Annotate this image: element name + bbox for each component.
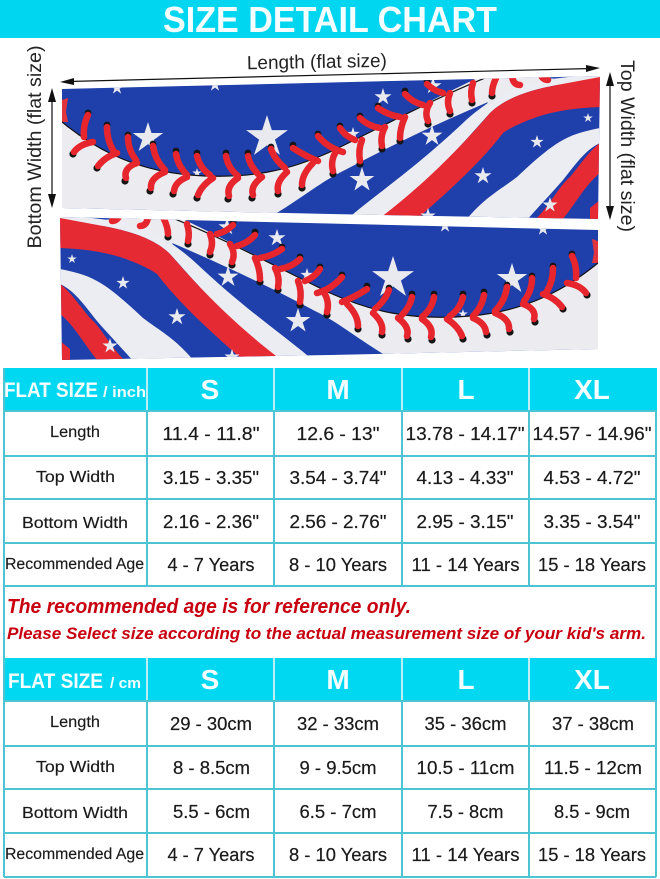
row: bottom width cm [22,802,630,822]
row: length [50,424,652,444]
inch header row: / inch [103,384,146,401]
row: length: 11.4 - 11.8" [162,424,260,444]
label: bottom width: Bottom Width (flat size) [25,46,46,248]
row: length cm: 32 - 33cm [297,714,379,734]
row: top width: 3.15 - 3.35" [163,468,259,488]
row: bottom width cm: 6.5 - 7cm [300,802,376,822]
row: top width cm: 9 - 9.5cm [300,758,376,778]
row: recommended age cm: 11 - 14 Years [412,845,520,865]
label: top width: Top Width (flat size) [616,60,637,232]
inch header row [3,368,657,411]
row: recommended age: 11 - 14 Years [412,555,520,575]
row: recommended age cm [5,845,646,865]
cm grid [4,658,656,877]
row: top width: 4.13 - 4.33" [416,468,514,488]
note line 1: The recommended age is for reference only. [7,596,411,618]
sleeve: bottom [50,211,605,366]
inch header row: XL [574,374,610,405]
row: length: Length [50,424,100,441]
row: bottom width cm: Bottom Width [22,805,128,822]
row: top width: Top Width [36,469,115,486]
row: bottom width: Bottom Width [22,515,128,532]
label: length: Length (flat size) [247,51,387,74]
table: inch [3,368,657,586]
row: top width cm: 11.5 - 12cm [544,758,642,778]
row: recommended age: Recommended Age [5,556,144,573]
row: recommended age: 8 - 10 Years [289,555,387,575]
row: bottom width cm: 5.5 - 6cm [173,802,250,822]
sleeve: top [55,70,610,225]
inch grid [4,368,656,586]
row: length cm: Length [50,714,100,731]
row: length cm: 29 - 30cm [170,714,252,734]
inch header row: FLAT SIZE [4,379,98,402]
row: recommended age cm: 15 - 18 Years [538,845,646,865]
row: recommended age cm: 8 - 10 Years [289,845,387,865]
row: length cm: 37 - 38cm [552,714,634,734]
row: recommended age: 4 - 7 Years [168,555,254,575]
row: top width cm [36,758,642,778]
inch header row: S [201,374,219,405]
row: bottom width cm: 7.5 - 8cm [428,802,504,822]
row: top width: 4.53 - 4.72" [544,468,640,488]
cm header row: XL [574,664,610,695]
row: length cm [50,714,634,734]
row: bottom width [22,512,640,532]
row: length: 14.57 - 14.96" [532,424,652,444]
row: bottom width: 2.56 - 2.76" [290,512,386,532]
cm header row: S [201,664,219,695]
note [4,586,656,658]
row: recommended age cm: Recommended Age [5,846,144,863]
row: recommended age cm: 4 - 7 Years [168,845,254,865]
row: top width [36,468,640,488]
title banner [0,0,660,40]
row: top width cm: 8 - 8.5cm [173,758,250,778]
cm header row [3,658,657,701]
cm header row: FLAT SIZE [8,670,103,693]
row: top width cm: Top Width [36,759,115,776]
table: cm [3,658,657,877]
row: length: 12.6 - 13" [296,424,380,444]
row: bottom width: 2.16 - 2.36" [163,512,259,532]
row: top width cm: 10.5 - 11cm [416,758,514,778]
cm header row: / cm [110,675,141,692]
arrow: top width [606,72,614,220]
cm header row: M [326,664,350,695]
row: top width: 3.54 - 3.74" [290,468,386,488]
row: recommended age: 15 - 18 Years [538,555,646,575]
row: bottom width: 3.35 - 3.54" [544,512,640,532]
row: length cm: 35 - 36cm [424,714,506,734]
inch header row: M [326,374,350,405]
arrow: length [60,65,600,85]
row: bottom width cm: 8.5 - 9cm [554,802,630,822]
inch header row: L [457,374,475,405]
title: SIZE DETAIL CHART [163,0,497,40]
row: bottom width: 2.95 - 3.15" [416,512,514,532]
row: recommended age [5,555,646,575]
cm header row: L [457,664,475,695]
note line 2: Please Select size according to the actual measurement size of your kid's arm. [7,624,646,643]
row: length: 13.78 - 14.17" [406,424,524,444]
arrow: bottom width [48,88,56,208]
